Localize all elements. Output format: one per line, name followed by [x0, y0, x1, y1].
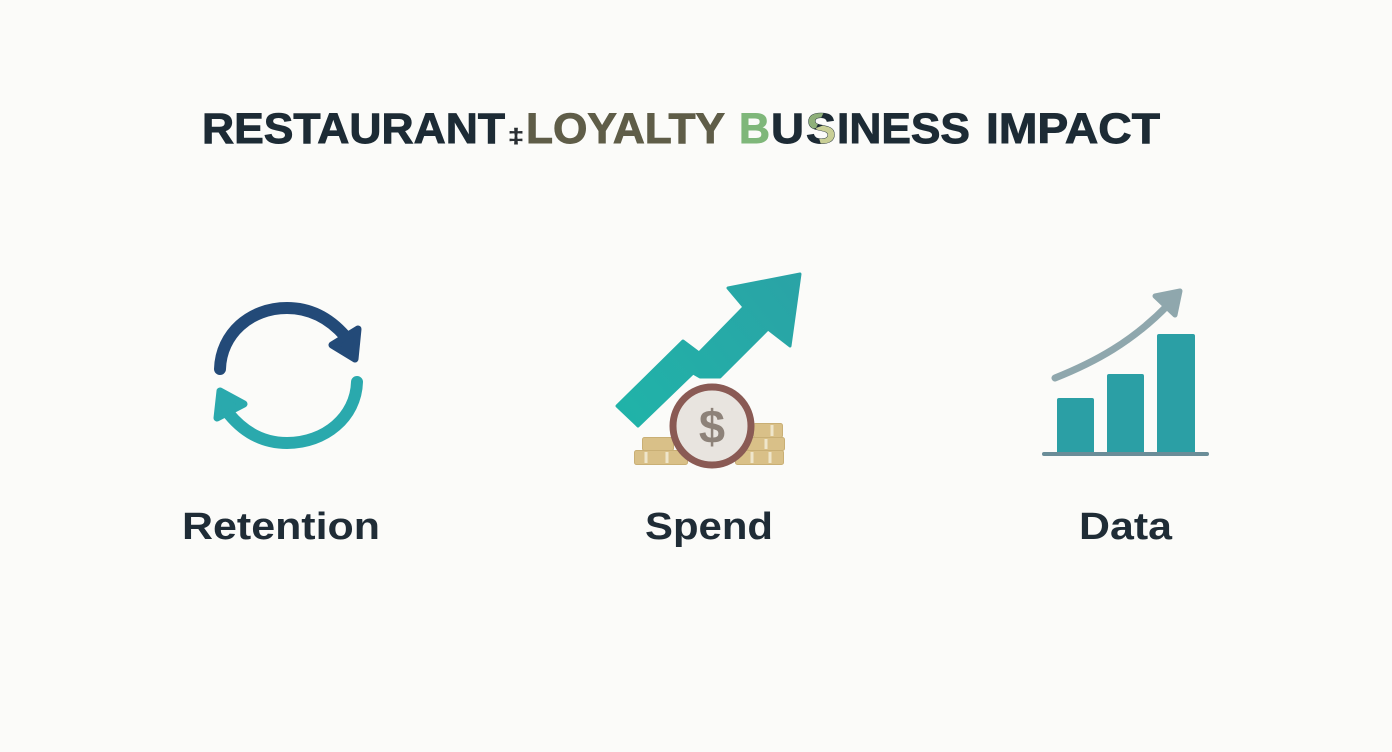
icon: growth arrow with coins: $	[699, 400, 725, 453]
title	[204, 112, 1160, 144]
title: U	[771, 105, 804, 153]
title: S	[806, 105, 836, 153]
title: INESS	[837, 105, 970, 153]
icon: growth arrow with coins	[617, 274, 800, 465]
title: S	[806, 105, 836, 153]
title: B	[739, 105, 770, 153]
title: LOYALTY	[526, 105, 725, 153]
baseline	[1044, 452, 1207, 456]
title: IMPACT	[986, 105, 1160, 153]
label: Data: Data	[1079, 506, 1173, 548]
upward arrow	[617, 274, 800, 426]
trend arrow	[1055, 305, 1168, 378]
title: S	[806, 105, 836, 153]
title: RESTAURANT	[202, 105, 505, 153]
bars	[1057, 398, 1094, 454]
coin stacks	[634, 424, 784, 464]
label: Retention: Retention	[182, 506, 380, 548]
label: Spend: Spend	[645, 506, 773, 548]
title: ‡	[508, 126, 524, 148]
dollar coin	[673, 387, 751, 465]
icon: bar chart with trend arrow	[1044, 291, 1207, 454]
icon: retention cycle arrows	[217, 308, 358, 443]
